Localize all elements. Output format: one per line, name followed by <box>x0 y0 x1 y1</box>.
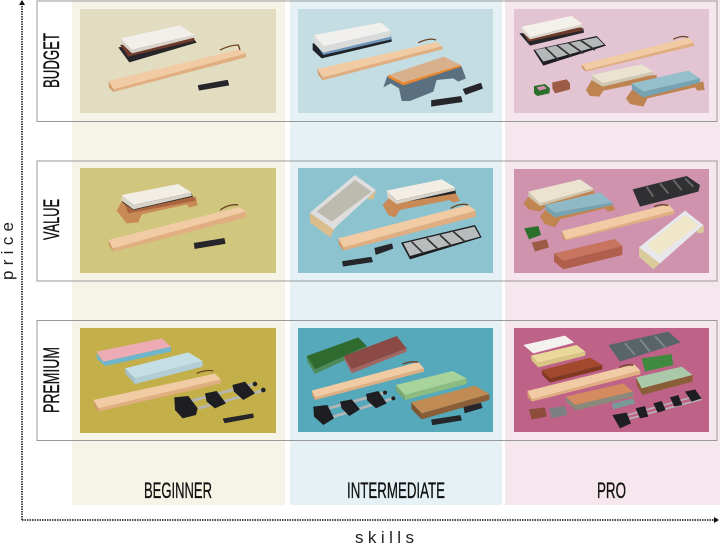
products: budget beginner <box>109 25 246 92</box>
row label: value: VALUE <box>39 199 64 240</box>
products: value intermediate <box>310 175 482 266</box>
column label: pro: PRO <box>597 478 626 503</box>
row frame: value <box>37 161 717 281</box>
panel: premium pro <box>514 328 709 432</box>
products: value beginner <box>108 184 246 252</box>
panel: premium intermediate <box>298 328 493 432</box>
column background: beginner <box>72 0 285 505</box>
axis label: skills: skills <box>355 528 414 547</box>
panel: budget beginner <box>80 9 276 113</box>
products: premium intermediate <box>307 336 489 425</box>
products: budget intermediate <box>313 23 482 106</box>
axis: skills arrow <box>22 517 719 523</box>
panel: budget intermediate <box>298 9 493 113</box>
column label: beginner: BEGINNER <box>144 478 212 503</box>
panel: premium beginner <box>80 328 276 433</box>
row frame: budget <box>37 1 717 122</box>
panel: value pro <box>514 169 709 273</box>
axis: price arrow <box>19 0 25 520</box>
products: budget pro <box>519 16 705 107</box>
row frame: premium <box>37 320 717 440</box>
products: value pro <box>523 176 704 269</box>
panel: value beginner <box>80 168 276 273</box>
column label: intermediate: INTERMEDIATE <box>347 478 445 503</box>
column background: pro <box>505 0 720 505</box>
products: premium beginner <box>93 338 266 423</box>
panel: value intermediate <box>298 168 493 273</box>
row label: premium: PREMIUM <box>39 347 64 413</box>
panel: budget pro <box>514 9 709 113</box>
column background: intermediate <box>290 0 502 505</box>
products: premium pro <box>523 332 702 428</box>
